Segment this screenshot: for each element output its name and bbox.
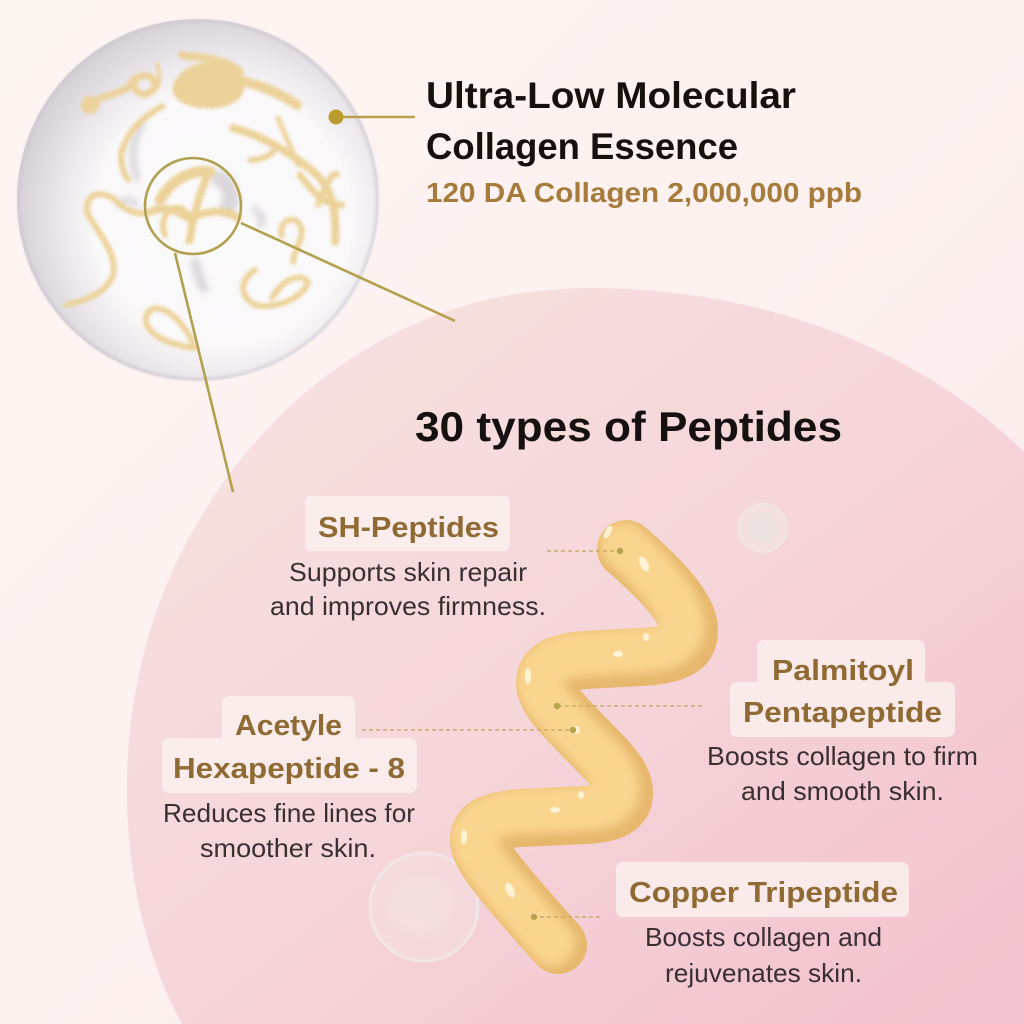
title: Collagen Essence: [426, 126, 738, 167]
label: SH-Peptides: [305, 496, 510, 551]
label: Acetyle Hexapeptide - 8: Acetyle: [235, 710, 342, 742]
label: SH-Peptides: SH-Peptides: [318, 512, 499, 544]
illustration: peptide chain: [450, 520, 718, 974]
illustration: collagen dish: [17, 19, 379, 381]
panel: peptides background shape: [127, 288, 1024, 1024]
text: Acetyle description: smoother skin.: [200, 833, 376, 863]
heading: peptides: 30 types of Peptides: [415, 403, 842, 450]
title: [426, 75, 796, 167]
magnifier ring: [145, 158, 241, 254]
text: Copper description: rejuvenates skin.: [665, 958, 862, 988]
label: Copper Tripeptide: [616, 862, 909, 917]
connector: magnifier to peptide panel, upper: [241, 223, 455, 321]
text: SH-Peptides description: Supports skin repair: [289, 557, 527, 587]
subtitle: 120 DA Collagen 2,000,000 ppb: [426, 177, 862, 208]
label: Palmitoyl Pentapeptide: Pentapeptide: [743, 697, 942, 729]
connector: magnifier to peptide panel, lower: [175, 253, 233, 492]
text: Copper description: Boosts collagen and: [645, 922, 882, 952]
collagen strands: [66, 55, 342, 348]
text: SH-Peptides description: [270, 557, 546, 621]
leader lines and dots: [362, 548, 703, 920]
bubble: small: [739, 504, 787, 552]
text: Palmitoyl description: [707, 741, 978, 806]
text: Palmitoyl description: and smooth skin.: [741, 776, 944, 806]
label: Copper Tripeptide: Copper Tripeptide: [629, 877, 898, 909]
text: Acetyle description: Reduces fine lines for: [163, 798, 415, 828]
label: Palmitoyl Pentapeptide: Palmitoyl: [772, 655, 914, 687]
label: Palmitoyl Pentapeptide: [730, 640, 955, 737]
label: Acetyle Hexapeptide - 8: [162, 696, 417, 793]
text: Palmitoyl description: Boosts collagen to firm: [707, 741, 978, 771]
label: Acetyle Hexapeptide - 8: Hexapeptide - 8: [173, 753, 405, 785]
text: Acetyle description: [163, 798, 415, 863]
highlights: [461, 524, 651, 899]
text: SH-Peptides description: and improves firmness.: [270, 591, 546, 621]
text: Copper description: [645, 922, 882, 988]
connector: dish to title: [328, 110, 415, 124]
title: Ultra-Low Molecular: [426, 75, 796, 116]
bubble: large: [370, 853, 478, 961]
